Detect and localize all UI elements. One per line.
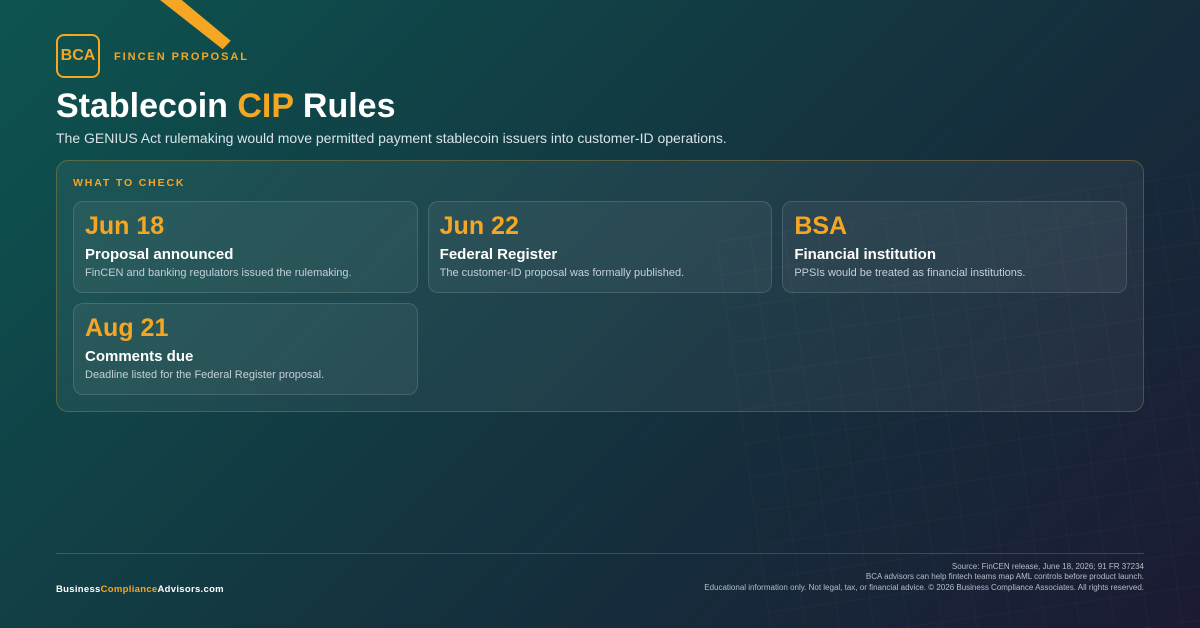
card: Jun 18: Jun 18 (85, 212, 164, 240)
card: Jun 18: Proposal announced (85, 246, 233, 263)
footer divider (56, 553, 1144, 554)
footer source and disclaimer: BCA advisors can help fintech teams map AML controls before product launch. (866, 572, 1144, 581)
panel heading: WHAT TO CHECK (73, 177, 185, 189)
card: Jun 22: Federal Register (440, 246, 557, 263)
card: BSA (782, 201, 1127, 293)
subtitle: The GENIUS Act rulemaking would move permitted payment stablecoin issuers into customer-ID operations. (56, 130, 727, 146)
decorative orange diagonal bar (160, 0, 231, 50)
card: BSA: Financial institution (794, 246, 936, 263)
eyebrow label: FINCEN PROPOSAL (114, 50, 249, 62)
footer source and disclaimer (704, 562, 1144, 592)
footer source and disclaimer: Educational information only. Not legal, tax, or financial advice. © 2026 Business Compliance Associates. All rights reserved. (704, 582, 1144, 592)
logo badge: BCA (61, 47, 95, 64)
card: Aug 21 (73, 303, 418, 395)
card: BSA: BSA (794, 212, 847, 240)
footer source and disclaimer: Source: FinCEN release, June 18, 2026; 91 FR 37234 (952, 562, 1144, 570)
card: Jun 18 (73, 201, 418, 293)
card: Jun 22 (428, 201, 772, 293)
card: Jun 22: Jun 22 (440, 212, 519, 240)
footer website: BusinessComplianceAdvisors.com (56, 584, 224, 594)
logo badge (56, 34, 100, 78)
title: Stablecoin CIP Rules (56, 87, 396, 125)
card: Aug 21: Aug 21 (85, 314, 168, 342)
card: Jun 22: The customer-ID proposal was formally published. (440, 267, 684, 279)
card: Aug 21: Deadline listed for the Federal Register proposal. (85, 369, 324, 381)
card: BSA: PPSIs would be treated as financial institutions. (794, 267, 1025, 279)
card: Aug 21: Comments due (85, 348, 193, 365)
card: Jun 18: FinCEN and banking regulators issued the rulemaking. (85, 267, 352, 279)
panel: what to check (56, 160, 1144, 412)
